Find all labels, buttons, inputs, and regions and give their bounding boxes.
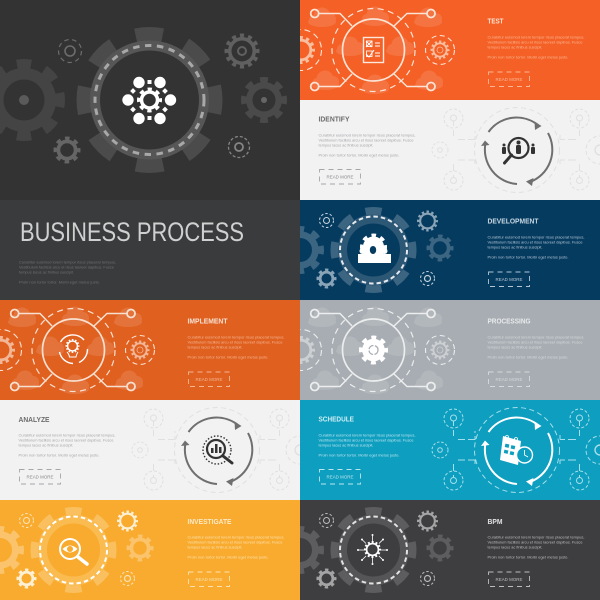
button: read more (320, 170, 360, 184)
button: read more (488, 372, 530, 386)
text block: tempus lacus ac finibus suscipit. (188, 344, 242, 350)
button: read more: READ MORE (496, 77, 522, 82)
button: read more (488, 72, 530, 86)
text block: intro (19, 260, 116, 284)
icon: checklist (364, 38, 384, 62)
panel: hero gears (0, 27, 287, 173)
cycle arrows (481, 418, 552, 486)
text block: Curabitur euismod lorem tempor risus placerat tempus, (488, 234, 584, 240)
heading: IMPLEMENT (188, 318, 228, 326)
panel: identify (300, 100, 600, 200)
text block: intro: tempus lacus ac finibus suscipit. (19, 270, 74, 274)
text block (488, 234, 584, 260)
heading: business process: BUSINESS PROCESS (20, 217, 244, 247)
text block: Vestibulum facilisis arcu et risus laoreet dapibus. Fusce (488, 340, 582, 344)
big left gear (0, 64, 60, 136)
text block: tempus lacus ac finibus suscipit. (488, 244, 542, 250)
button: read more (188, 572, 230, 586)
panel: investigate (0, 500, 300, 600)
text block: Curabitur euismod lorem tempor risus placerat tempus, (318, 132, 416, 138)
icon: eye magnifier (59, 538, 87, 564)
text block: Proin non tortor tortor. Morbi eget metus justo. (318, 452, 400, 458)
text block: Proin non tortor tortor. Morbi eget metus justo. (488, 554, 568, 560)
text block (18, 432, 116, 458)
button: read more (20, 470, 60, 484)
text block (318, 132, 416, 158)
hub gear (336, 512, 412, 588)
text block: Vestibulum facilisis arcu et risus laoreet dapibus. Fusce (188, 540, 282, 544)
heading: DEVELOPMENT (488, 218, 539, 226)
heading: BPM (488, 519, 503, 526)
text block: Vestibulum facilisis arcu et risus laoreet dapibus. Fusce (18, 438, 114, 442)
text block: Curabitur euismod lorem tempor risus placerat tempus, (488, 34, 584, 40)
text block: Curabitur euismod lorem tempor risus placerat tempus, (488, 334, 584, 340)
panel: title (0, 200, 300, 300)
button: read more (488, 572, 530, 586)
satellite gears (0, 512, 152, 587)
text block: intro: Vestibulum facilisis arcu et risus laoreet dapibus. Fusce (19, 264, 114, 270)
circuit diagram (280, 8, 454, 92)
text block: intro: Curabitur euismod lorem tempor risus placerat tempus, (19, 260, 116, 264)
button: read more (488, 272, 530, 286)
heading: SCHEDULE (318, 416, 354, 424)
button: read more: READ MORE (496, 577, 522, 582)
panel: test (300, 0, 600, 100)
panel: implement (0, 300, 300, 400)
satellite gears (279, 512, 452, 587)
button: read more: READ MORE (196, 577, 222, 582)
text block: tempus lacus ac finibus suscipit. (18, 442, 74, 448)
text block (318, 432, 416, 458)
panel: bpm (300, 500, 600, 600)
text block: Curabitur euismod lorem tempor risus placerat tempus, (318, 432, 416, 438)
circuit diagram (280, 308, 454, 392)
text block: Curabitur euismod lorem tempor risus placerat tempus, (488, 534, 584, 540)
text block: Proin non tortor tortor. Morbi eget metus justo. (488, 54, 568, 60)
text block (488, 34, 584, 60)
text block: Vestibulum facilisis arcu et risus laoreet dapibus. Fusce (188, 340, 282, 344)
panel: processing (300, 300, 600, 400)
text block: Proin non tortor tortor. Morbi eget metus justo. (488, 354, 568, 360)
icon: process gear (361, 337, 386, 363)
button: read more: READ MORE (26, 474, 54, 480)
text block: intro: Proin non tortor tortor. Morbi eget metus justo. (19, 280, 100, 284)
cycle arrows (181, 418, 252, 486)
hub gear (36, 512, 112, 588)
text block: Proin non tortor tortor. Morbi eget metus justo. (18, 452, 100, 458)
text block: Curabitur euismod lorem tempor risus placerat tempus, (18, 432, 116, 438)
text block: tempus lacus ac finibus suscipit. (488, 44, 542, 50)
satellite gears (279, 212, 452, 287)
icon: chart magnifier (203, 436, 232, 464)
icon: idea bulb gear (60, 335, 88, 364)
text block (488, 334, 584, 360)
heading: TEST (488, 18, 504, 26)
dashed network (132, 408, 314, 492)
text block: Vestibulum facilisis arcu et risus laoreet dapibus. Fusce (488, 540, 582, 544)
icon: network gear (122, 77, 176, 124)
button: read more: READ MORE (496, 277, 522, 282)
cycle arrows (481, 118, 552, 186)
text block: Proin non tortor tortor. Morbi eget metus justo. (188, 554, 268, 560)
text block: tempus lacus ac finibus suscipit. (188, 544, 242, 550)
circuit diagram (0, 308, 154, 392)
text block: Proin non tortor tortor. Morbi eget metus justo. (488, 254, 568, 260)
dashed network (432, 108, 600, 192)
text block: Proin non tortor tortor. Morbi eget metus justo. (318, 152, 400, 158)
text block: Curabitur euismod lorem tempor risus placerat tempus, (188, 334, 284, 340)
text block: Vestibulum facilisis arcu et risus laoreet dapibus. Fusce (318, 438, 414, 442)
text block: Vestibulum facilisis arcu et risus laoreet dapibus. Fusce (488, 240, 582, 244)
button: read more: READ MORE (496, 377, 522, 382)
small gears (55, 36, 284, 162)
panel: analyze (0, 400, 300, 500)
text block: Curabitur euismod lorem tempor risus placerat tempus, (188, 534, 284, 540)
text block: tempus lacus ac finibus suscipit. (488, 544, 542, 550)
icon: bpm gear rays (357, 534, 388, 565)
text block (488, 534, 584, 560)
icon: people magnifier (502, 138, 535, 163)
icon: team gear (358, 235, 391, 263)
button: read more (320, 470, 360, 484)
text block: tempus lacus ac finibus suscipit. (488, 344, 542, 350)
text block (188, 534, 284, 560)
heading: ANALYZE (18, 417, 50, 424)
button: read more: READ MORE (196, 377, 222, 382)
text block: Proin non tortor tortor. Morbi eget metus justo. (188, 354, 268, 360)
hub gear (336, 212, 412, 288)
text block: tempus lacus ac finibus suscipit. (318, 142, 374, 148)
heading: IDENTIFY (318, 116, 350, 124)
button: read more: READ MORE (326, 174, 354, 180)
text block: Vestibulum facilisis arcu et risus laoreet dapibus. Fusce (318, 138, 414, 142)
button: read more (188, 372, 230, 386)
text block: Vestibulum facilisis arcu et risus laoreet dapibus. Fusce (488, 40, 582, 44)
text block (188, 334, 284, 360)
panel: schedule (300, 400, 600, 500)
panel: development (300, 200, 600, 300)
icon: calendar and clock (500, 436, 532, 465)
text block: tempus lacus ac finibus suscipit. (318, 442, 374, 448)
central gear (84, 34, 216, 166)
button: read more: READ MORE (326, 474, 354, 480)
heading: PROCESSING (488, 318, 531, 326)
dashed network (432, 408, 600, 492)
heading: INVESTIGATE (188, 519, 232, 526)
